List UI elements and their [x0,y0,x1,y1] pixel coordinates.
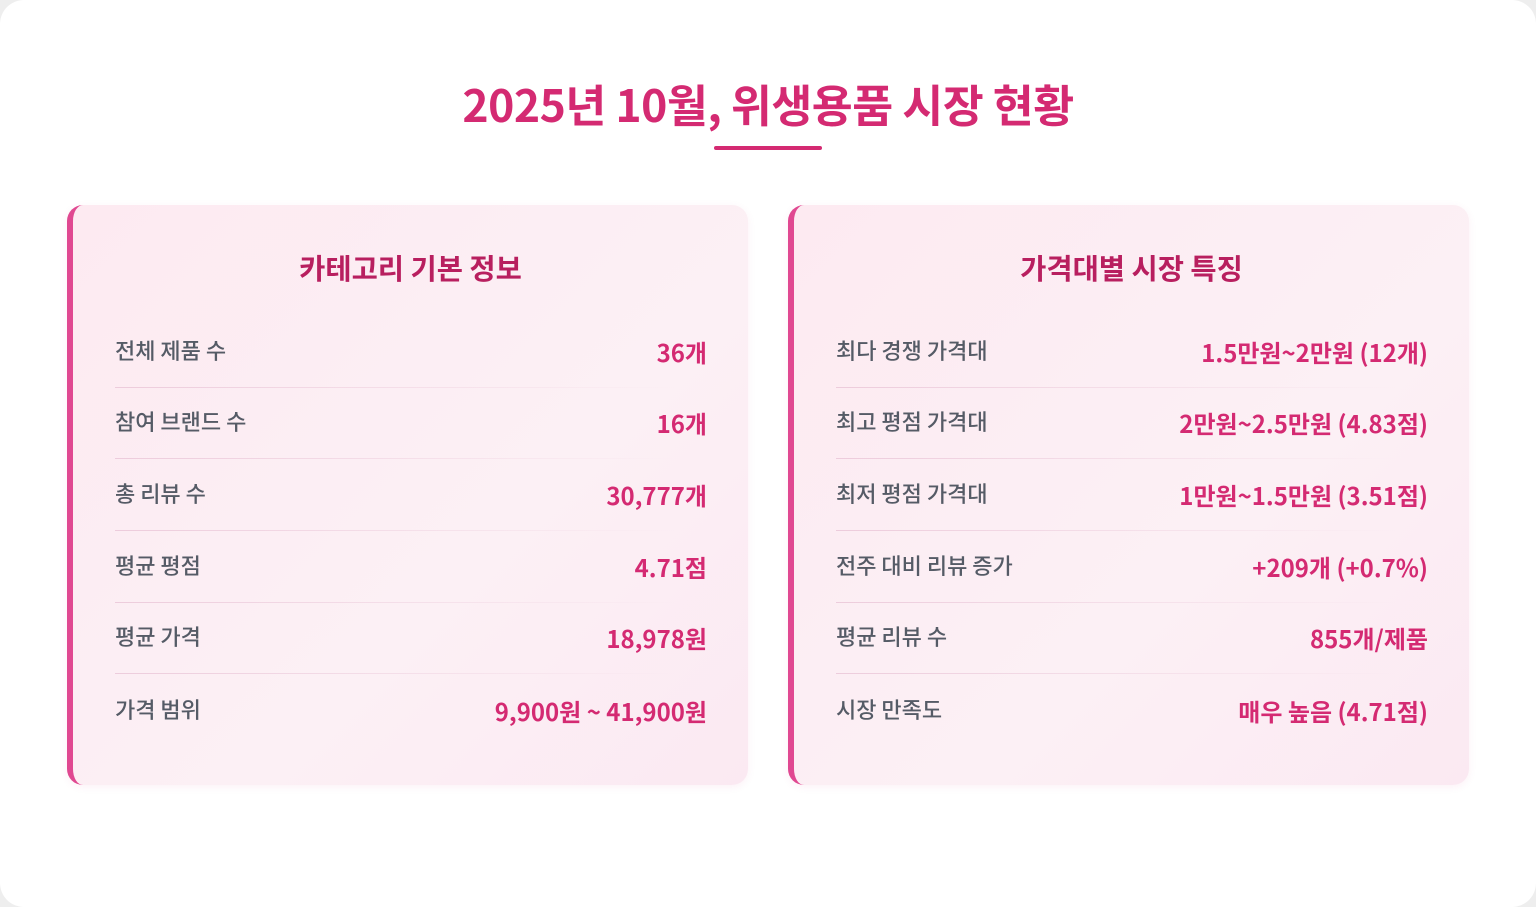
row: brands [115,405,707,459]
row: most competitive [836,334,1428,388]
row: most competitive: 최다 경쟁 가격대 [836,334,988,366]
row: avg price: 평균 가격 [115,620,201,652]
row: avg reviews: 평균 리뷰 수 [836,620,947,652]
panel heading: 카테고리 기본 정보 [299,247,522,288]
row: satisfaction: 시장 만족도 [836,693,942,725]
row: lowest rated: 최저 평점 가격대 [836,477,988,509]
row: avg price: 18,978원 [606,620,707,655]
row: brands: 참여 브랜드 수 [115,405,246,437]
row: most competitive: 1.5만원~2만원 (12개) [1201,334,1428,369]
row: highest rated: 2만원~2.5만원 (4.83점) [1179,405,1428,440]
title underline [714,146,822,150]
row: highest rated [836,405,1428,459]
row: total products: 36개 [657,334,707,369]
row: rating: 4.71점 [635,549,707,584]
row: review growth [836,549,1428,603]
row: price range: 가격 범위 [115,693,201,725]
row: lowest rated: 1만원~1.5만원 (3.51점) [1179,477,1428,512]
title: 2025년 10월, 위생용품 시장 현황 [462,70,1074,135]
panel: price segments [788,205,1469,785]
row: review growth: 전주 대비 리뷰 증가 [836,549,1013,581]
row: avg reviews [836,620,1428,674]
row: brands: 16개 [657,405,707,440]
row: rating [115,549,707,603]
row: highest rated: 최고 평점 가격대 [836,405,988,437]
row: reviews: 총 리뷰 수 [115,477,206,509]
row: avg reviews: 855개/제품 [1310,620,1428,655]
row: review growth: +209개 (+0.7%) [1252,549,1428,584]
row: satisfaction [836,693,1428,728]
row: avg price [115,620,707,674]
row: satisfaction: 매우 높음 (4.71점) [1238,693,1428,728]
row: reviews: 30,777개 [606,477,707,512]
panel heading: 가격대별 시장 특징 [1020,247,1243,288]
panel: category info [67,205,748,785]
row: lowest rated [836,477,1428,531]
row: total products: 전체 제품 수 [115,334,226,366]
row: reviews [115,477,707,531]
row: total products [115,334,707,388]
row: price range [115,693,707,728]
row: price range: 9,900원 ~ 41,900원 [495,693,707,728]
row: rating: 평균 평점 [115,549,201,581]
